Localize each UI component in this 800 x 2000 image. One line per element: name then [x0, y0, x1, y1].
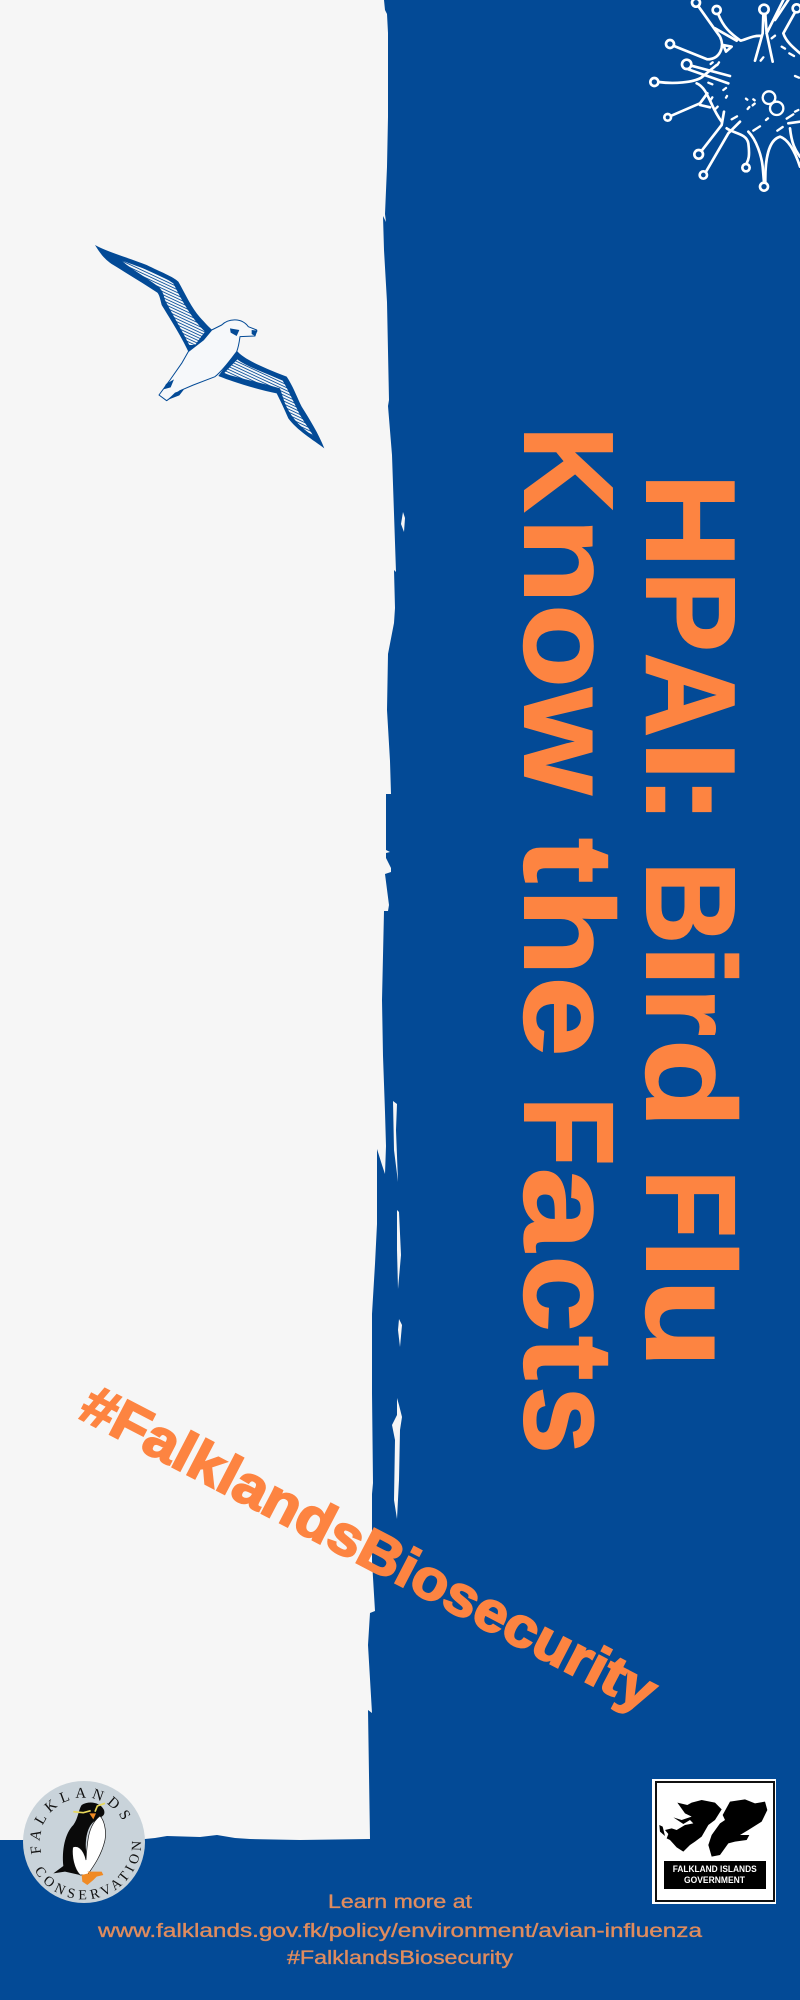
title: line two: a [498, 1168, 638, 1252]
title: line one: u [620, 1279, 761, 1368]
left wing [95, 245, 212, 352]
right wing hatching [224, 359, 313, 436]
title: line one: r [620, 988, 760, 1036]
title: line two: w [498, 688, 640, 795]
logo caption line one: FALKLAND ISLANDS [673, 1864, 757, 1875]
footer: learn more: Learn more at [328, 1892, 473, 1913]
title: line one: I [620, 740, 761, 781]
title: line two: F [498, 1097, 638, 1166]
title: line two: K [498, 426, 639, 512]
brush slivers along the edge [392, 512, 405, 1519]
footer: web address: www.falklands.gov.fk/policy/environment/avian-influenza [97, 1921, 703, 1942]
title: line one: F [619, 1170, 759, 1238]
title: line one: H [619, 474, 760, 568]
icon: virus [650, 0, 800, 191]
logo ring text: top: FALKLANDS [30, 1788, 130, 1854]
title: line two: s [497, 1386, 638, 1454]
title: line two: h [498, 888, 639, 976]
title: line one: i [620, 943, 761, 988]
title: line two: e [498, 976, 639, 1057]
feet [163, 379, 184, 400]
title: line one: P [619, 571, 760, 652]
title: line two: t [498, 838, 639, 883]
title: line one: d [620, 1039, 762, 1128]
title: line two [497, 426, 640, 1454]
icon: rockhopper penguin [53, 1802, 106, 1885]
title: line two: o [498, 604, 639, 688]
title: line two: c [498, 1255, 639, 1332]
logo: Falklands Conservation [23, 1781, 145, 1903]
logo: Falkland Islands Government [652, 1779, 776, 1904]
title: line one: B [620, 862, 760, 944]
logo caption line two: GOVERNMENT [684, 1875, 745, 1886]
title: line one: : [620, 773, 761, 826]
icon: albatross in flight [95, 245, 324, 448]
footer: hashtag: #FalklandsBiosecurity [287, 1948, 514, 1969]
hashtag: diagonal: #FalklandsBiosecurity [71, 1372, 668, 1723]
panel: white painted area with rough edge [0, 0, 396, 1840]
logo ring text: bottom: CONSERVATION [36, 1841, 142, 1900]
icon: map of the islands [659, 1799, 767, 1857]
title: line two: n [498, 518, 638, 604]
title: line one [619, 474, 762, 1368]
title: line two: t [498, 1336, 638, 1380]
title: line one: A [620, 653, 761, 737]
body and head [159, 320, 257, 401]
right wing [218, 351, 324, 448]
title: line one: l [620, 1238, 761, 1279]
left wing hatching [122, 261, 205, 345]
beak and eye [230, 328, 258, 336]
